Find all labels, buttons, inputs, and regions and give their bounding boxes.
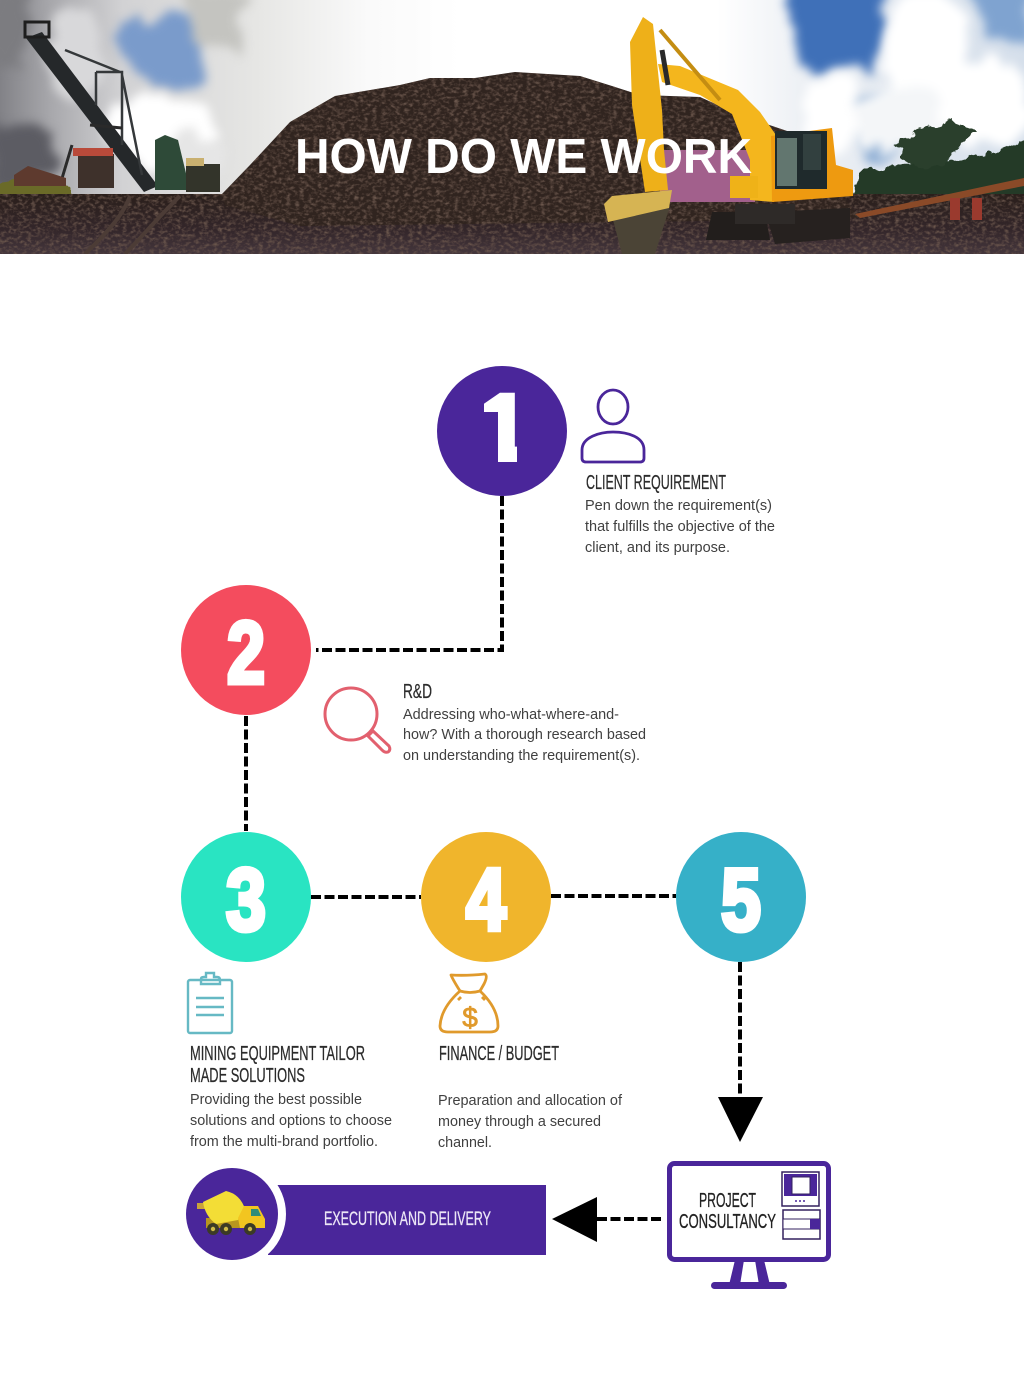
icon: clipboard <box>188 973 232 1033</box>
icon: money bag <box>440 974 498 1033</box>
step 3 text: MINING EQUIPMENT TAILOR <box>190 1043 365 1065</box>
execution and delivery bar: EXECUTION AND DELIVERY <box>324 1209 491 1230</box>
step 4 text <box>438 1043 623 1151</box>
execution and delivery bar <box>178 1160 546 1268</box>
conveyor and tower <box>14 22 220 192</box>
step 2 circle: 2 <box>227 603 265 702</box>
step 1 circle: 1 <box>480 377 528 479</box>
step 3 circle <box>181 832 311 962</box>
step 4 text: Preparation and allocation of <box>438 1093 623 1109</box>
banner photo: mining site <box>0 0 1024 254</box>
step 3 text: Providing the best possible <box>190 1092 362 1108</box>
connector: 3 to 4 <box>311 895 421 899</box>
step 1 text: Pen down the requirement(s) <box>585 498 772 514</box>
step 2 text: Addressing who-what-where-and- <box>403 707 619 723</box>
treeline <box>0 118 1024 194</box>
step 3 text <box>190 1043 392 1150</box>
step 3 circle: 3 <box>226 850 266 949</box>
step 1 text: CLIENT REQUIREMENT <box>586 472 726 494</box>
step 1 text: client, and its purpose. <box>585 540 730 556</box>
ground tracks <box>85 196 180 254</box>
monitor: project consultancy: PROJECT <box>699 1190 756 1212</box>
connector: 1 to 2 <box>316 496 502 650</box>
step 4 text: money through a secured <box>438 1114 601 1130</box>
step 5 circle <box>676 832 806 962</box>
connector: monitor to delivery <box>597 1217 662 1221</box>
icon: money bag: $ <box>462 1002 478 1033</box>
step 5 circle: 5 <box>721 850 761 949</box>
step 2 circle <box>181 585 311 715</box>
step 1 text: that fulfills the objective of the <box>585 519 775 535</box>
ground <box>0 194 1024 254</box>
step 4 circle <box>421 832 551 962</box>
icon: cement mixer truck <box>197 1191 265 1235</box>
arrowhead: left <box>552 1197 597 1242</box>
coal mound <box>222 72 787 226</box>
title: HOW DO WE WORK <box>295 130 752 184</box>
connector: 5 to monitor <box>738 962 742 1098</box>
connector: 2 to 3 <box>244 716 248 831</box>
step 1 circle <box>437 366 567 496</box>
icon: person <box>582 390 644 462</box>
step 1 text <box>585 472 775 556</box>
step 2 text <box>403 681 646 764</box>
sky patches <box>0 0 1024 185</box>
step 3 text: solutions and options to choose <box>190 1113 392 1129</box>
step 3 text: from the multi-brand portfolio. <box>190 1134 378 1150</box>
arrowhead: down <box>718 1097 763 1142</box>
step 2 text: on understanding the requirement(s). <box>403 748 640 764</box>
connector: 4 to 5 <box>551 894 676 898</box>
step 4 circle: 4 <box>466 850 506 949</box>
excavator <box>604 17 853 254</box>
monitor: project consultancy: CONSULTANCY <box>679 1211 776 1233</box>
step 2 text: R&D <box>403 681 432 703</box>
monitor: project consultancy <box>670 1164 828 1289</box>
step 4 text: channel. <box>438 1135 492 1151</box>
icon: magnifier <box>325 688 390 752</box>
step 2 text: how? With a thorough research based <box>403 727 646 743</box>
pink container <box>660 150 755 202</box>
step 3 text: MADE SOLUTIONS <box>190 1065 305 1087</box>
right conveyor <box>855 178 1024 218</box>
step 4 text: FINANCE / BUDGET <box>439 1043 559 1065</box>
